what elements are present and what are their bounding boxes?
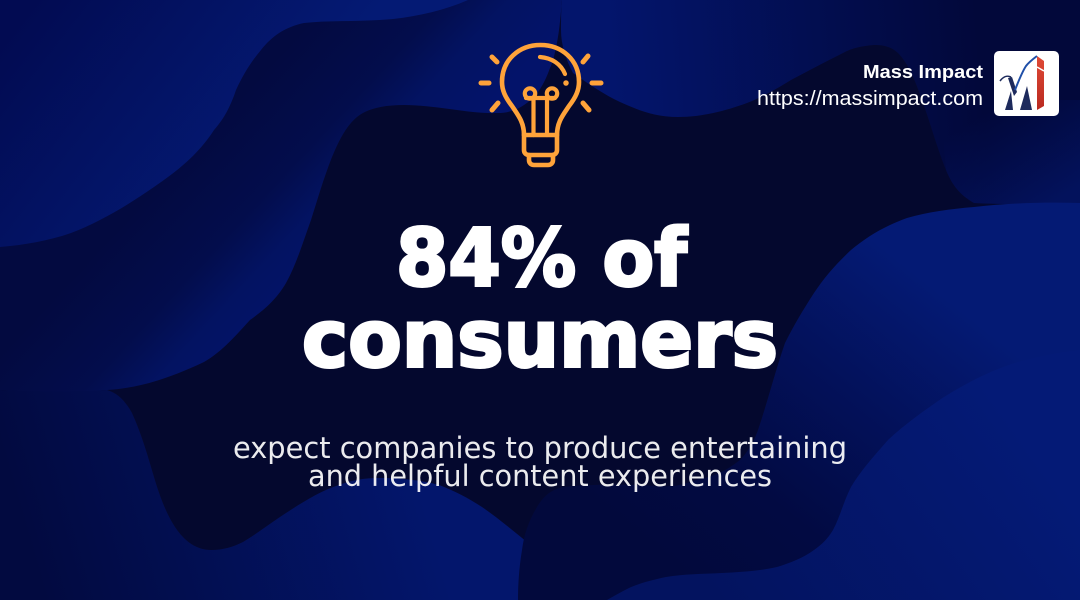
rays	[481, 56, 601, 110]
blob: top right	[561, 0, 1080, 205]
brand name: Mass Impact	[863, 62, 983, 82]
blob: bottom left	[0, 390, 527, 600]
bulb outline	[502, 45, 579, 135]
logo white notch	[1037, 67, 1044, 71]
filament right loop	[547, 88, 557, 99]
blob: top right lower glow	[940, 100, 1080, 205]
logo	[994, 51, 1059, 116]
bulb base	[524, 135, 557, 155]
blob: upper left outer	[0, 0, 562, 392]
headline line 1: 84% of	[396, 212, 689, 304]
blob: lower right outer	[518, 203, 1080, 600]
headline line 2: consumers	[302, 294, 778, 386]
logo red column	[1037, 56, 1044, 110]
logo letter M	[1005, 77, 1032, 110]
filament	[526, 98, 555, 135]
subtext line 2: and helpful content experiences	[308, 459, 772, 493]
blob: lower right inner	[607, 350, 1080, 600]
logo check swoop	[1000, 76, 1011, 81]
filament left loop	[525, 88, 535, 99]
bulb cap	[529, 155, 553, 165]
subtext line 1: expect companies to produce entertaining	[233, 431, 847, 465]
blob: upper left inner	[0, 0, 468, 247]
logo tile	[994, 51, 1059, 116]
brand url: https://massimpact.com	[757, 88, 983, 110]
logo check mark	[1015, 56, 1037, 90]
glass dot	[564, 81, 568, 85]
glass highlight	[540, 57, 565, 74]
icon: light bulb	[481, 45, 601, 165]
